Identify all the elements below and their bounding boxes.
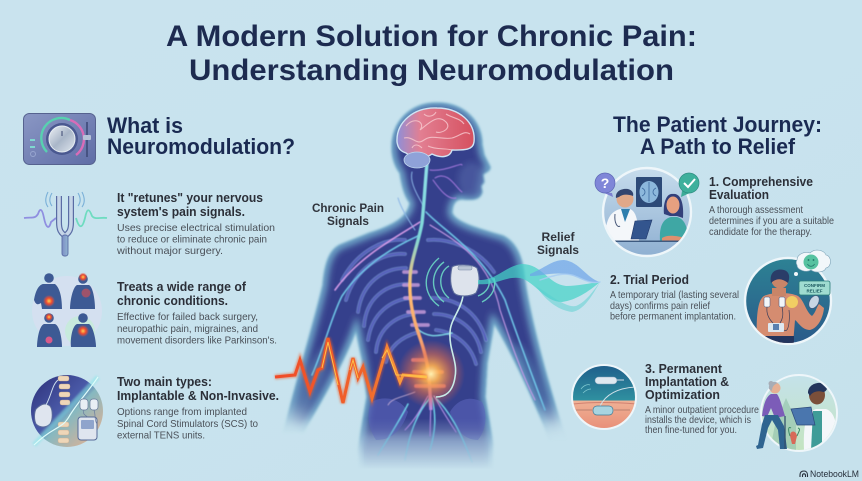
text: retunes body: Uses precise electrical stimulation <box>117 223 275 234</box>
title: Understanding Neuromodulation <box>189 54 674 87</box>
text: conditions body: Effective for failed back surgery, <box>117 312 258 323</box>
text: retunes body <box>116 223 275 257</box>
ribs <box>342 240 494 364</box>
panel: step 2 trial period <box>610 250 831 345</box>
panel: step 1 evaluation <box>595 168 834 256</box>
text: types body: Options range from implanted <box>117 407 247 418</box>
text: types body: external TENS units. <box>117 430 205 442</box>
text: step 3 body: A minor outpatient procedure <box>645 405 759 416</box>
vertebrae <box>404 272 444 386</box>
label: relief signals: Signals <box>537 243 579 257</box>
text: retunes heading: It "retunes" your nervous <box>117 190 263 205</box>
lumbar pain glow <box>397 340 465 408</box>
text: types heading <box>117 374 279 403</box>
text: types body: Spinal Cord Stimulators (SCS) to <box>117 419 258 430</box>
icon: implantable vs non-invasive circle <box>31 375 103 447</box>
text: step 2 body <box>610 290 739 322</box>
text: retunes body: to reduce or eliminate chronic pain <box>117 234 267 246</box>
text: step 2 body: A temporary trial (lasting several <box>610 290 739 301</box>
panel: step 3 implantation <box>572 361 838 451</box>
implant device <box>426 258 495 397</box>
text: step 1 body <box>709 205 834 238</box>
label: chronic pain signals <box>312 201 384 228</box>
cerebellum <box>404 152 430 168</box>
icon: question bubble: ? <box>601 175 609 191</box>
label: relief signals <box>537 230 579 257</box>
text: step 2 heading: 2. Trial Period <box>610 272 689 287</box>
text: step 3 heading: 3. Permanent <box>645 361 723 376</box>
icon: control dial <box>24 114 96 164</box>
icon: doctor and patient <box>595 168 699 256</box>
text: conditions heading: Treats a wide range of <box>117 279 247 294</box>
text: step 1 body: candidate for the therapy. <box>709 227 812 238</box>
heading: the patient journey: The Patient Journey: <box>613 112 822 137</box>
icon: walking elderly patient <box>756 381 787 449</box>
text: step 2 body: days) confirms pain relief <box>610 301 710 312</box>
label: chronic pain signals: Chronic Pain <box>312 201 384 215</box>
icon: patient back with electrodes <box>745 250 831 345</box>
text: conditions body: movement disorders like Parkinson's. <box>117 336 277 346</box>
heading: what is neuromodulation: What is <box>107 113 183 138</box>
panel: what is neuromodulation <box>24 113 295 164</box>
text: step 1 body: A thorough assessment <box>709 205 803 216</box>
icon: four body figures <box>32 272 102 347</box>
central figure: human body with nervous system <box>270 95 600 481</box>
text: step 3 heading: Implantation & <box>645 374 729 389</box>
text: step 1 heading <box>709 174 813 202</box>
label: relief signals: Relief <box>542 230 576 244</box>
spine <box>410 163 431 410</box>
icon: tuning fork with waves <box>24 192 107 256</box>
nerve branches <box>312 164 545 462</box>
heading: the patient journey <box>613 112 822 159</box>
icon: implanted device under skin <box>572 365 636 429</box>
text: step 1 heading: 1. Comprehensive <box>709 174 813 189</box>
text: retunes heading <box>117 190 263 219</box>
pelvis <box>369 398 485 440</box>
icon: check bubble <box>679 173 699 197</box>
text: retunes body: without major surgery. <box>116 246 223 257</box>
heading: what is neuromodulation <box>107 113 295 159</box>
icon: patient walking with doctor <box>761 375 838 451</box>
text: step 3 body <box>645 405 759 436</box>
text: step 3 body: installs the device, which is <box>645 415 751 426</box>
text: types heading: Implantable & Non-Invasive. <box>117 388 279 403</box>
relief signal waves <box>478 260 600 312</box>
body silhouette <box>285 100 562 466</box>
brain <box>397 108 474 168</box>
text: step 1 heading: Evaluation <box>709 187 769 202</box>
text: types heading: Two main types: <box>117 374 212 389</box>
title: A Modern Solution for Chronic Pain: <box>166 20 697 53</box>
text: step 2 body: before permanent implantation. <box>610 312 736 322</box>
heading: what is neuromodulation: Neuromodulation? <box>107 134 295 159</box>
text: conditions body <box>117 312 277 346</box>
title <box>166 20 697 87</box>
text: step 3 heading: Optimization <box>645 387 720 402</box>
panel: retunes item <box>24 190 275 257</box>
label: confirm relief box <box>799 281 830 295</box>
text: step 3 body: then fine-tuned for you. <box>645 425 737 436</box>
icon: thought bubble smiley <box>794 250 830 276</box>
text: conditions heading: chronic conditions. <box>117 293 228 308</box>
text: conditions heading <box>117 279 247 308</box>
label: confirm relief box: CONFIRM <box>804 283 825 288</box>
panel: conditions item <box>32 272 277 347</box>
pain signal zigzag <box>275 338 427 403</box>
label: chronic pain signals: Signals <box>327 214 369 228</box>
text: step 3 heading <box>645 361 729 402</box>
text: step 1 body: determines if you are a suitable <box>709 216 834 227</box>
text: types body <box>117 407 258 442</box>
text: conditions body: neuropathic pain, migraines, and <box>117 324 258 335</box>
label: confirm relief box: RELIEF <box>806 288 823 294</box>
heading: the patient journey: A Path to Relief <box>640 134 796 159</box>
panel: types item <box>31 374 279 447</box>
text: retunes heading: system's pain signals. <box>117 204 245 219</box>
